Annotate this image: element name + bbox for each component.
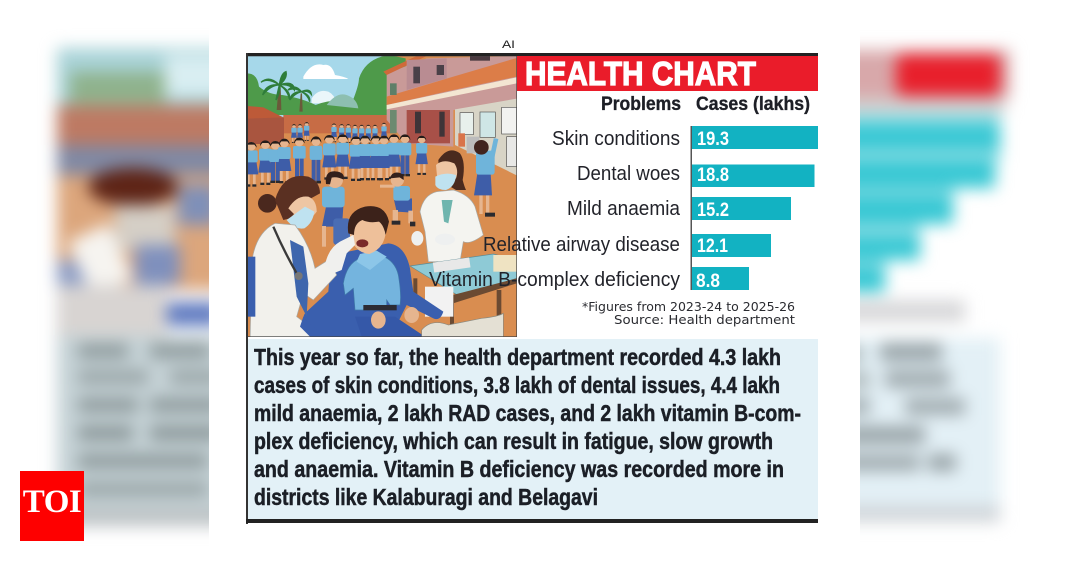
instrument table xyxy=(410,254,517,332)
bar: dental woes: 18.8 xyxy=(697,165,729,186)
problem labels: Skin conditions xyxy=(552,128,680,150)
notice board wall xyxy=(455,99,517,175)
child at notice board xyxy=(474,138,498,217)
bar: mild anaemia: 15.2 xyxy=(697,200,729,221)
doctor on the right xyxy=(411,150,483,262)
top and side rules xyxy=(246,53,818,524)
queue of children xyxy=(244,134,428,187)
footnote and source: *Figures from 2023-24 to 2025-26 xyxy=(582,299,795,314)
summary text: This year so far, the health department recorded 4.3 lakh xyxy=(254,344,781,370)
problem labels xyxy=(429,128,681,291)
blurred background: left panel xyxy=(44,38,209,534)
bar: vitamin B-complex deficiency: 8.8 xyxy=(696,271,720,292)
TOI logo xyxy=(20,471,84,541)
running children xyxy=(322,171,415,247)
main infographic xyxy=(246,40,818,524)
AI label: AI xyxy=(502,39,515,51)
image frame xyxy=(247,56,517,337)
bar: mild anaemia xyxy=(692,197,791,221)
illustration: school health check-up xyxy=(244,55,517,347)
column headings xyxy=(601,94,810,115)
summary text xyxy=(254,344,801,510)
back row of children xyxy=(291,122,387,144)
column headings: Cases (lakhs) xyxy=(696,94,810,115)
bar: relative airway disease xyxy=(692,234,771,257)
TOI logo: TOI xyxy=(23,484,81,520)
summary text: plex deficiency, which can result in fatigue, slow growth xyxy=(254,428,773,454)
bar: relative airway disease: 12.1 xyxy=(697,236,728,257)
summary text: cases of skin conditions, 3.8 lakh of dental issues, 4.4 lakh xyxy=(254,372,780,398)
blurred background: right panel xyxy=(860,38,1020,530)
bar: dental woes xyxy=(692,164,814,187)
problem labels: Vitamin B-complex deficiency xyxy=(429,269,680,291)
bar chart xyxy=(690,126,818,292)
compound wall and hut xyxy=(283,115,390,133)
problem labels: Mild anaemia xyxy=(567,198,681,220)
summary panel xyxy=(246,339,818,523)
doctor on the left xyxy=(247,176,355,347)
footnote and source xyxy=(582,299,795,327)
bar: vitamin B-complex deficiency xyxy=(692,267,749,292)
palm trees xyxy=(261,72,311,112)
summary text: and anaemia. Vitamin B deficiency was recorded more in xyxy=(254,456,784,482)
dental chair and boy patient xyxy=(303,206,443,345)
footnote and source: Source: Health department xyxy=(614,312,795,327)
bar: skin conditions: 19.3 xyxy=(697,129,729,150)
problem labels: Relative airway disease xyxy=(483,234,680,256)
summary text: mild anaemia, 2 lakh RAD cases, and 2 lakh vitamin B-com- xyxy=(254,400,801,426)
column headings: Problems xyxy=(601,94,681,115)
title banner: HEALTH CHART xyxy=(525,55,756,92)
school building xyxy=(387,56,517,147)
dental tray foreground xyxy=(422,313,503,337)
problem labels: Dental woes xyxy=(577,163,680,185)
bar: skin conditions xyxy=(692,126,818,150)
summary text: districts like Kalaburagi and Belagavi xyxy=(254,484,598,510)
